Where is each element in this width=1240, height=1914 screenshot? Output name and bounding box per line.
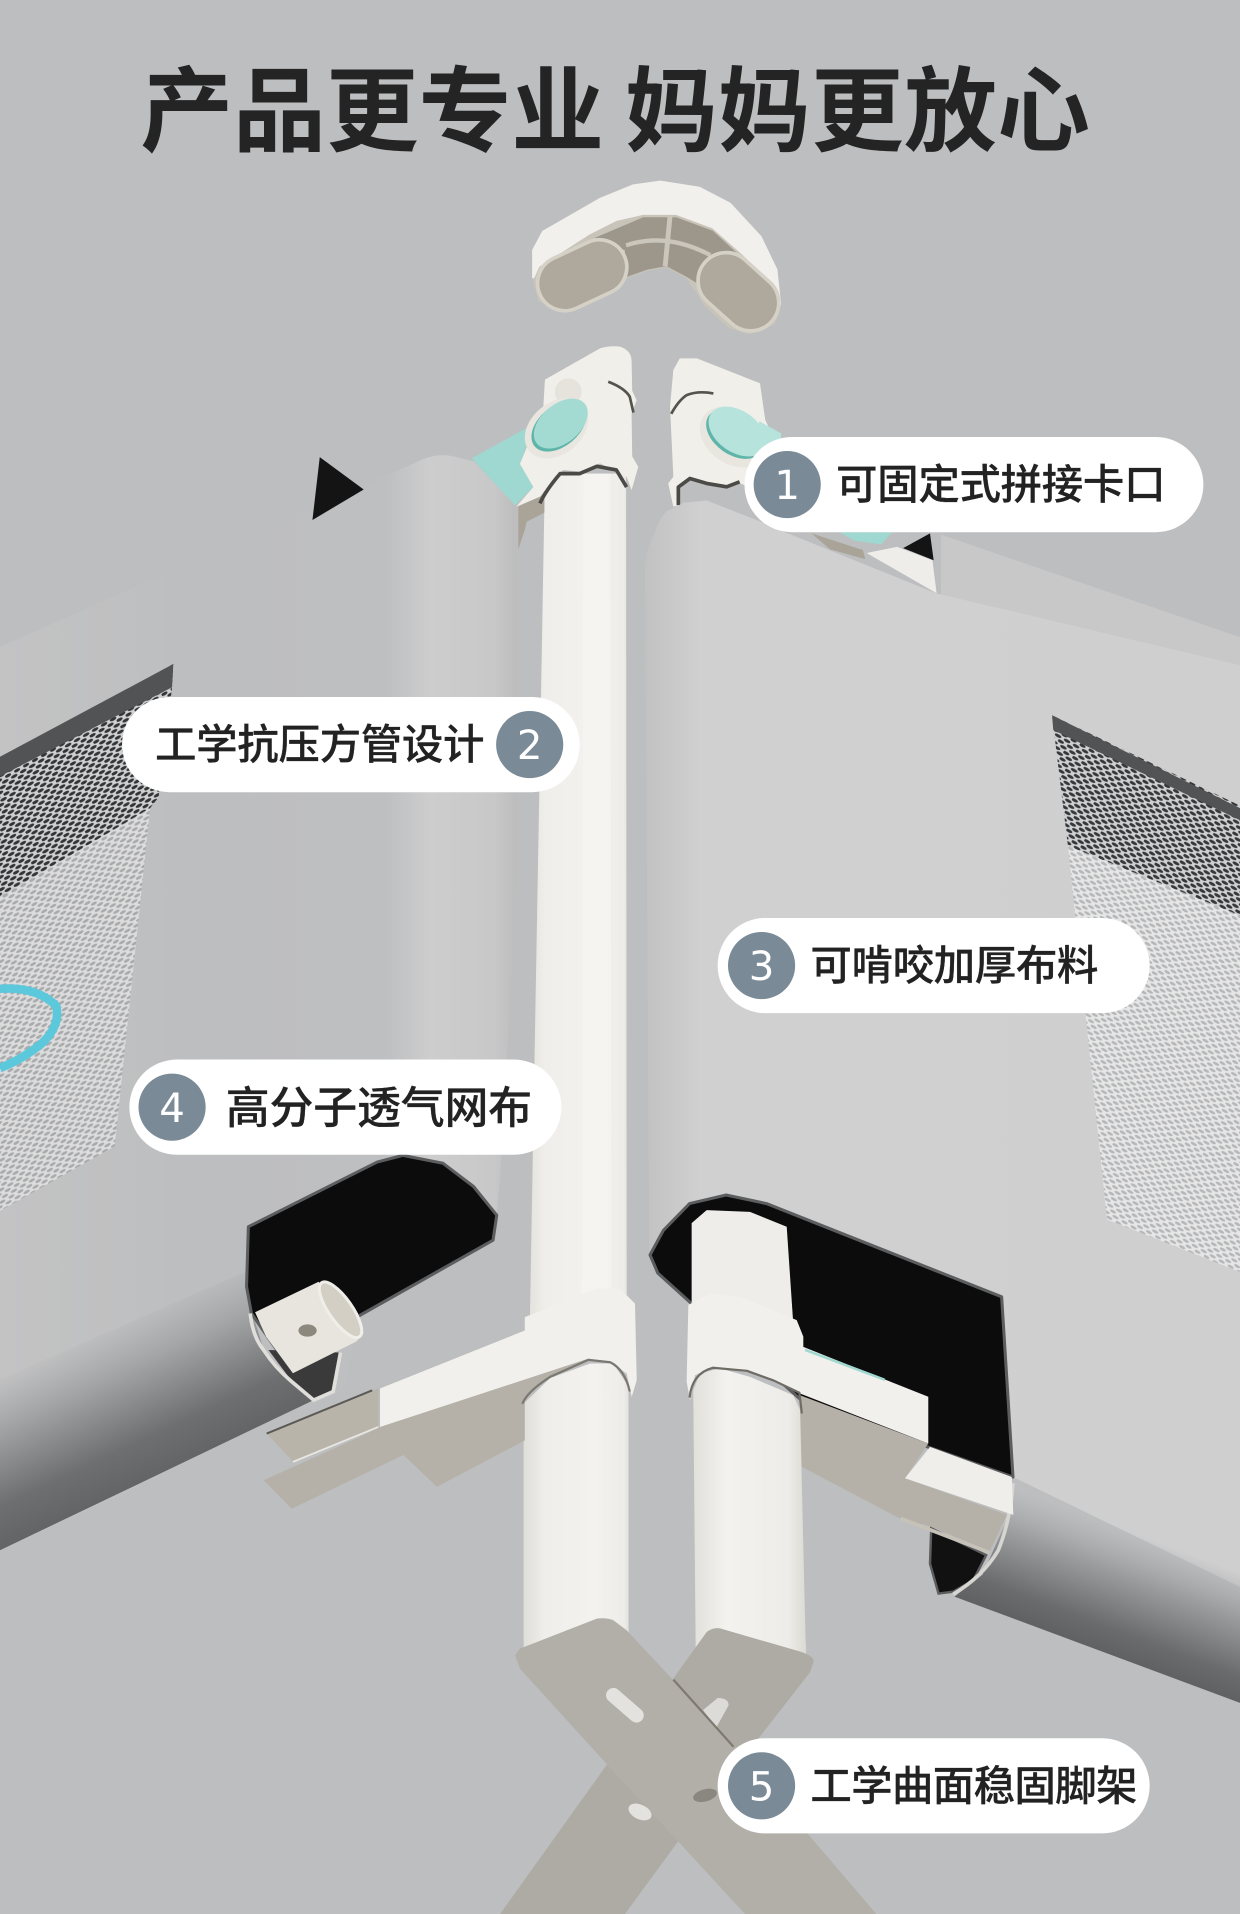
icon: black triangle behind right hinge — [903, 533, 934, 560]
callout 5: 工学曲面稳固脚架 — [810, 1762, 1137, 1809]
panel: right underside shadow — [954, 1471, 1240, 1703]
callout 3: 3 — [749, 944, 774, 990]
icon: upper white pole right — [692, 1210, 793, 1324]
mesh: left light section — [0, 808, 150, 1211]
icon: left hinge connector — [472, 346, 638, 549]
callout 1: 1 — [774, 463, 800, 509]
icon: right side lower pole — [693, 1368, 807, 1666]
callout 3 — [718, 918, 1150, 1013]
icon: left side lower pole — [524, 1363, 629, 1660]
mesh: left dark section — [0, 664, 173, 897]
title: 妈妈更放心 — [625, 60, 1090, 164]
callout 5 — [718, 1738, 1150, 1833]
icon: right connector arm — [812, 532, 937, 593]
icon: top corner connector cap — [529, 182, 790, 342]
mesh: right dark section — [1052, 715, 1240, 915]
icon: right lower black pocket — [930, 1483, 1013, 1594]
panel: right panel top cover — [645, 500, 781, 586]
icon: left panel black opening — [247, 1155, 497, 1373]
panel: left underside shadow — [0, 1269, 314, 1550]
title: 产品更专业 — [140, 60, 604, 164]
callout 4: 4 — [159, 1086, 185, 1132]
callout 1: 可固定式拼接卡口 — [836, 461, 1166, 508]
callout 5: 5 — [749, 1764, 774, 1810]
title — [140, 60, 1090, 164]
callout 2: 2 — [517, 723, 542, 769]
icon: cyan ring on mesh — [0, 988, 57, 1068]
icon: right panel black opening — [650, 1195, 1013, 1477]
callout 4 — [129, 1060, 561, 1155]
icon: upper white pole left — [530, 474, 627, 1331]
panel: left fence panel — [0, 455, 519, 1550]
mesh: right light section — [1068, 846, 1240, 1272]
callout 1 — [744, 437, 1203, 532]
icon: inner tube clip — [255, 1276, 369, 1373]
icon: black triangle on left panel — [312, 457, 364, 520]
icon: right bracket arm — [687, 1294, 1013, 1553]
panel: right fence panel — [645, 500, 1240, 1703]
icon: right hinge connector — [668, 358, 806, 507]
icon: rear foot plate — [500, 1628, 814, 1914]
callout 3: 可啃咬加厚布料 — [810, 942, 1098, 989]
icon: left lower pocket — [250, 1313, 341, 1400]
icon: front foot plate — [515, 1618, 876, 1914]
callout 2 — [122, 697, 580, 792]
icon: left bracket arm — [264, 1289, 637, 1509]
callout 4: 高分子透气网布 — [226, 1084, 532, 1133]
callout 2: 工学抗压方管设计 — [155, 721, 485, 768]
